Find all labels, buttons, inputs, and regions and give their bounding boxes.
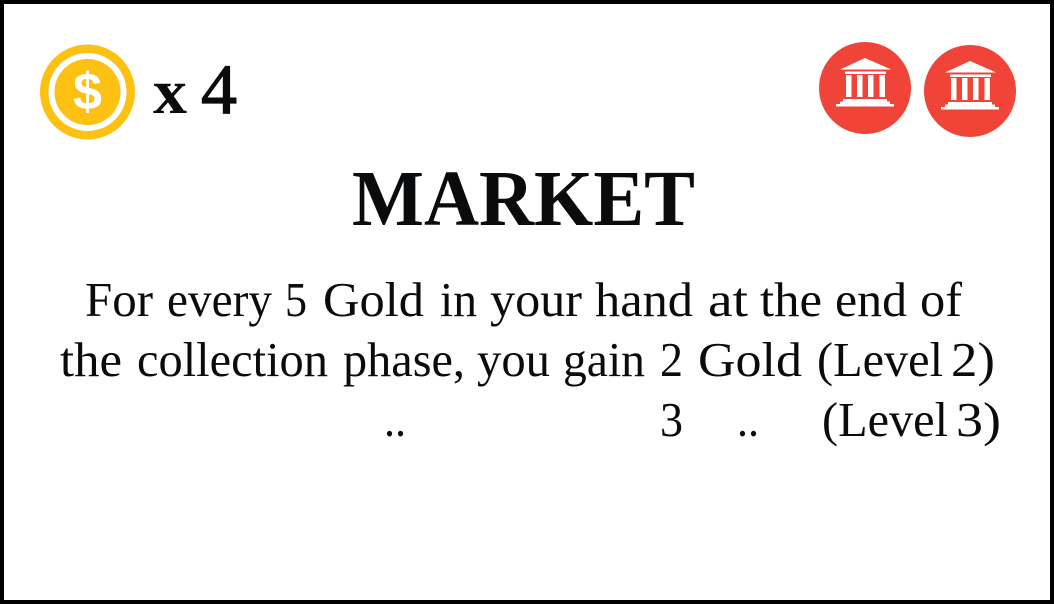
icon: bank level 2 <box>924 45 1016 137</box>
line 1: your <box>490 272 582 327</box>
line 1: hand <box>595 272 693 327</box>
description text <box>60 272 1001 447</box>
line 2: you <box>477 332 550 387</box>
icon: bank level 1 <box>819 42 911 134</box>
icon: gold coin <box>40 44 135 140</box>
line 3: .. <box>384 392 406 447</box>
line 3: (Level <box>822 392 948 447</box>
line 2: 2 <box>660 332 683 387</box>
line 2: Gold <box>698 332 802 387</box>
line 1: at <box>708 272 748 327</box>
coin cost: x 4: x <box>153 57 188 127</box>
line 1: of <box>920 272 963 327</box>
line 1: end <box>835 272 907 327</box>
line 1: Gold <box>323 272 424 327</box>
coin cost: x 4: 4 <box>201 51 237 129</box>
line 3 <box>384 392 1001 447</box>
title: MARKET <box>352 156 695 243</box>
line 2: 2) <box>951 332 995 387</box>
coin cost: x 4 <box>153 51 237 129</box>
line 3: 3) <box>956 392 1001 447</box>
line 2: gain <box>563 332 645 387</box>
line 2 <box>60 332 995 387</box>
line 2: collection <box>137 332 328 387</box>
line 1: the <box>760 272 822 327</box>
line 1: every <box>167 272 272 327</box>
line 1: For <box>85 272 153 327</box>
line 2: (Level <box>817 332 943 387</box>
line 2: the <box>60 332 122 387</box>
icon: gold coin: $ <box>73 63 102 121</box>
line 3: .. <box>737 392 759 447</box>
line 3: 3 <box>660 392 683 447</box>
line 2: phase, <box>343 332 465 387</box>
line 1: in <box>440 272 477 327</box>
line 1 <box>85 272 963 327</box>
line 1: 5 <box>285 272 307 327</box>
